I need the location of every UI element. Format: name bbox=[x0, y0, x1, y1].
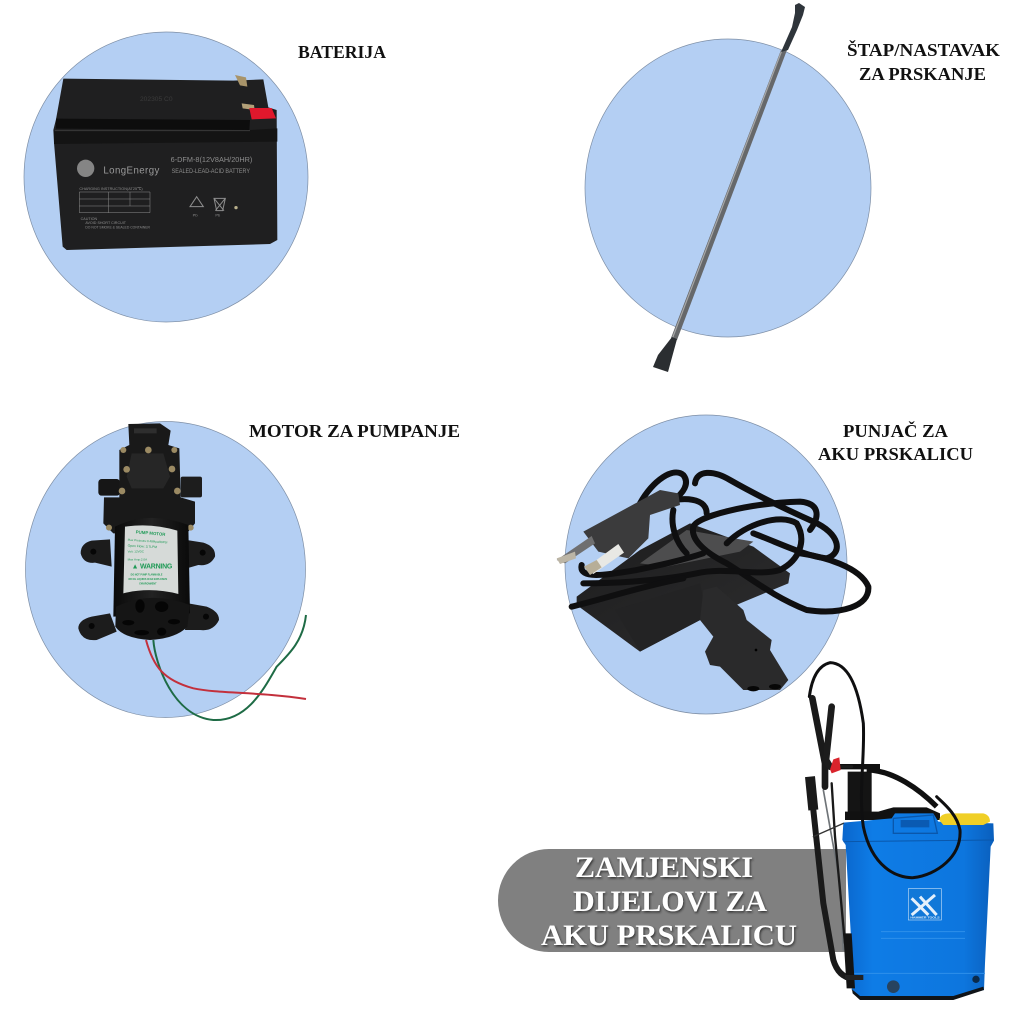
gauge and outlet bbox=[887, 980, 900, 993]
heading: motor: MOTOR ZA PUMPANJE bbox=[249, 421, 460, 441]
motor label: OR OIL LIQUIDS IN AN EXPLOSIVE bbox=[128, 578, 168, 581]
motor label: Volt: 12VDC bbox=[128, 550, 145, 554]
battery photo: 202305 C0 bbox=[140, 96, 173, 103]
pump motor photo bbox=[78, 423, 306, 720]
battery photo: CHARGING INSTRUCTION(AT25℃) bbox=[79, 186, 143, 191]
wand and hose bbox=[809, 663, 960, 978]
ports bbox=[98, 479, 120, 496]
battery photo: Pb bbox=[215, 213, 221, 218]
battery photo: 6-DFM-8(12V8AH/20HR) bbox=[171, 157, 252, 164]
battery photo: CAUTION bbox=[81, 217, 97, 221]
cables bbox=[572, 473, 868, 611]
heading: wand: ŠTAP/NASTAVAK bbox=[847, 40, 1000, 60]
motor label: ▲ WARNING bbox=[132, 564, 172, 571]
banner pill bbox=[498, 849, 846, 952]
bottom valve bbox=[843, 933, 855, 988]
euro plug bbox=[583, 490, 680, 558]
battery photo: DO NOT SMOKE & SEALED CONTAINER bbox=[85, 226, 150, 230]
background circle: charger bbox=[565, 415, 847, 714]
background circle: battery bbox=[24, 32, 308, 322]
wires bbox=[153, 615, 306, 720]
panel: battery bbox=[24, 32, 386, 322]
motor label: ENVIRONMENT bbox=[139, 583, 157, 585]
motor label: Max Pressure:0.48Mpa/80PSI bbox=[128, 538, 168, 544]
heading: wand: ZA PRSKANJE bbox=[859, 64, 986, 84]
battery photo: AVOID SHORT CIRCUIT bbox=[85, 221, 127, 225]
battery photo: Pb bbox=[193, 213, 198, 218]
battery photo: LongEnergy bbox=[103, 165, 160, 176]
battery photo bbox=[53, 75, 277, 250]
heading: battery: BATERIJA bbox=[298, 42, 386, 62]
title text bbox=[541, 851, 797, 952]
title banner bbox=[498, 849, 846, 952]
spray wand rod bbox=[653, 3, 805, 372]
background circle: wand bbox=[585, 39, 871, 337]
motor label: DO NOT PUMP FLAMMABLE bbox=[131, 574, 163, 577]
motor label: Max Amp:2.0A bbox=[128, 557, 147, 561]
motor label: Open Flow: 3.7LPM bbox=[128, 544, 157, 549]
logo: HAMMER TOOLS bbox=[910, 916, 940, 920]
heading: charger: AKU PRSKALICU bbox=[818, 444, 973, 464]
title text: ZAMJENSKI bbox=[575, 851, 753, 884]
tank body bbox=[842, 813, 994, 998]
battery photo: SEALED-LEAD-ACID BATTERY bbox=[172, 168, 251, 175]
logo bbox=[908, 889, 941, 920]
power brick bbox=[577, 523, 790, 652]
IEC connector bbox=[700, 587, 788, 690]
title text: DIJELOVI ZA bbox=[573, 885, 767, 918]
heading: charger bbox=[818, 421, 973, 464]
red lever bbox=[830, 757, 841, 773]
background circle: motor bbox=[26, 422, 306, 718]
panel: pump motor bbox=[26, 421, 460, 720]
heading: wand bbox=[847, 40, 1000, 84]
heading: charger: PUNJAČ ZA bbox=[843, 421, 948, 441]
motor label: PUMP MOTOR bbox=[136, 529, 166, 537]
pump cylinder and handle bbox=[848, 772, 872, 813]
motor body bbox=[113, 518, 190, 617]
backpack sprayer photo bbox=[809, 663, 994, 1000]
panel: spray wand bbox=[585, 3, 1000, 372]
feet bbox=[78, 539, 219, 640]
panel: charger bbox=[557, 415, 973, 714]
pump head bbox=[103, 423, 195, 533]
motor label bbox=[123, 525, 178, 594]
charger photo bbox=[557, 473, 868, 691]
title text: AKU PRSKALICU bbox=[541, 919, 797, 952]
yellow cap bbox=[939, 813, 990, 825]
